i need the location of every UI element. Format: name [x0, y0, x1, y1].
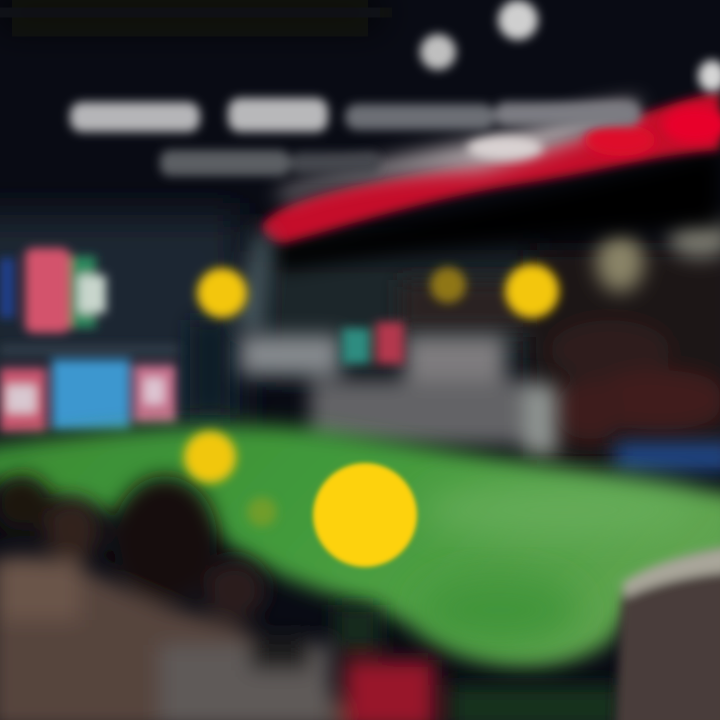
- goal area: [240, 335, 557, 455]
- right crowd: [400, 250, 720, 460]
- flag: [0, 248, 106, 333]
- roof: black underside: [270, 150, 720, 270]
- yellow ball: left stand: [197, 268, 247, 318]
- football pitch: [0, 425, 720, 667]
- crowd highlights: [596, 218, 720, 471]
- billboards: [0, 345, 180, 432]
- yellow ball: large: [313, 463, 417, 567]
- lights: white spots: [420, 0, 538, 70]
- roof: red stripe: [262, 60, 720, 243]
- title text (illegible in reference): [70, 98, 640, 176]
- yellow ball: right stand: [505, 264, 559, 318]
- yellow ball: faint on pitch: [247, 497, 277, 527]
- goal flag: [342, 322, 404, 364]
- bottom-left crowd: [0, 475, 620, 720]
- pillar: [190, 228, 272, 415]
- upper stands haze: [0, 0, 540, 430]
- yellow ball: pitch edge: [184, 431, 236, 483]
- yellow ball: dim: [430, 267, 466, 303]
- bottom-right stand: [615, 546, 720, 720]
